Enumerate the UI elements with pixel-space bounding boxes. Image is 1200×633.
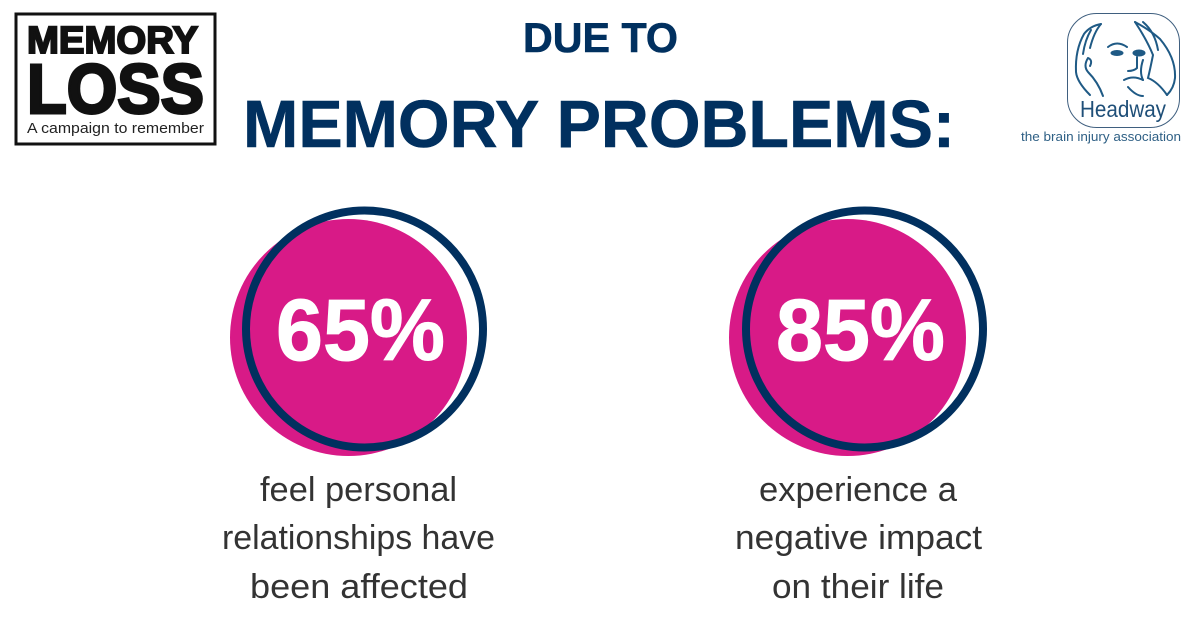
logo: Headway: the brain injury association bbox=[1021, 129, 1181, 144]
panel: 65 percent bbox=[222, 210, 495, 606]
circle: pink fill bbox=[729, 219, 966, 456]
circle: navy ring bbox=[746, 210, 983, 448]
heading: due to: DUE TO bbox=[523, 14, 678, 61]
text: caption 65%: relationships have bbox=[222, 519, 495, 557]
circle: navy ring bbox=[246, 210, 483, 448]
text: caption 85%: negative impact bbox=[735, 519, 983, 557]
logo: Headway bbox=[1021, 14, 1181, 144]
circle: pink fill bbox=[230, 219, 467, 456]
logo: Memory Loss campaign bbox=[16, 14, 215, 144]
panel: 85 percent bbox=[729, 210, 983, 606]
logo: Memory Loss campaign: A campaign to remember bbox=[27, 121, 204, 137]
text: caption 85%: experience a bbox=[759, 471, 957, 509]
text: caption 85%: on their life bbox=[772, 568, 944, 606]
text: caption 65%: feel personal bbox=[260, 471, 457, 509]
heading: memory problems: MEMORY PROBLEMS: bbox=[243, 87, 955, 162]
logo: Headway: Headway bbox=[1080, 96, 1166, 122]
statistic: 85%: 85% bbox=[776, 282, 945, 379]
icon: eyes bbox=[1110, 50, 1146, 56]
logo: Memory Loss campaign: MEMORY bbox=[27, 20, 198, 62]
logo: Memory Loss campaign: LOSS bbox=[27, 50, 204, 128]
statistic: 65%: 65% bbox=[276, 282, 445, 379]
icon: face and hands bbox=[1076, 22, 1175, 96]
text: caption 65% bbox=[222, 471, 495, 606]
text: caption 85% bbox=[735, 471, 983, 606]
text: caption 65%: been affected bbox=[250, 568, 468, 606]
